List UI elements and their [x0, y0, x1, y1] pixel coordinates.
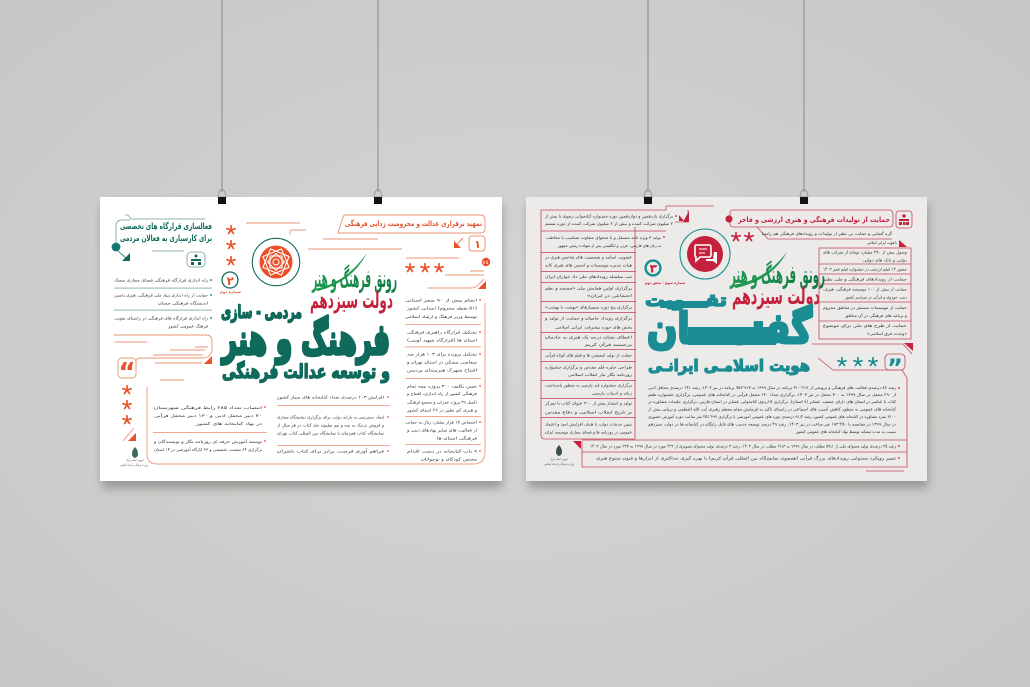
list: left panel rows: عمومی در روزنامه ها و فضای مجازی موسسه ایران — [545, 430, 632, 434]
paragraph: growth statistics: کتاب با عناصر در استان های دارای جمعیت عشایر (۹ استان)، برگزاری ۵ اردوی کتابخوانی عشایر در استان فارس، برگزاری جلسات مشاوره در — [647, 399, 896, 404]
table: right column: و برنامه های فرهنگی در آن مناطق — [845, 313, 907, 318]
badge: number 2: شماره دوم — [220, 290, 241, 294]
title: main heading: فرهنگ و هنر — [221, 315, 390, 365]
table: right column: حضور ۱۲ فیلم ارزشی در جشنواره فیلم فجر ۱۴۰۳ — [823, 266, 907, 272]
list: left top bullets: حمایت از راه اندازی بنیاد ملی فرهنگی، هنری یاسین — [114, 292, 208, 298]
connector lines right — [406, 258, 486, 289]
poster 1 — [100, 197, 502, 481]
list: left top bullets — [114, 278, 212, 328]
table: right column: دینی، حوزوی و قرآنی در سراسر کشور — [844, 294, 907, 300]
list: right column bullets: انجام بیش از ۹۰ سفر استانی — [405, 298, 477, 302]
list: bottom left bullets: توسعه آموزش حرفه ای روزنامه نگار و نویسندگان و — [153, 439, 263, 444]
table: right column: وصول بیش از ۲۷۰ میلیارد تومان از شرکت های — [823, 250, 907, 254]
icon: box with number one: ۱ — [474, 238, 481, 251]
table: right column: حمایت از موسسات مستقر در مناطق محروم — [823, 305, 907, 310]
badge: section 11: ۱۱ — [482, 260, 488, 266]
logo: ministry emblem right — [544, 445, 574, 466]
logo: ministry emblem left: وزارت فرهنگ و ارشاد اسلامی — [120, 463, 148, 467]
list: middle column bullets: افزایش ۱۰۳ درصدی تعداد کتابخانه های سیار کشور — [276, 394, 384, 400]
list: right column bullets: فرهنگی کشور از راه اندازی، افتتاح و — [406, 391, 477, 396]
quote box: “ — [118, 358, 136, 388]
emblem: chat bubbles — [680, 229, 730, 279]
list: left panel rows: تولید و انتشار بیش از ۳۰۰ عنوان کتاب با تمرکز — [544, 400, 633, 406]
list: left panel rows: برگزاری جشنواره قند پارسی به منظور پاسداشت — [545, 382, 632, 388]
list: right column bullets: تعیین تکلیف ۳۰۰ پروژه نیمه تمام — [407, 384, 478, 388]
badge: number 2: ۲ — [227, 274, 235, 288]
list: left panel rows: اجتماعی در ایران» — [587, 293, 632, 298]
heading: left block — [120, 221, 212, 244]
logo: ministry emblem left: جمهوری اسلامی ایران — [126, 458, 144, 462]
table: right column: دولتی و بانک های دولتی — [863, 258, 907, 262]
list: middle column bullets — [276, 394, 390, 454]
list: middle column bullets: فراهم آوری فرصت برابر برای کتاب ناشران — [277, 448, 384, 454]
emblem: orange circle with geometric star — [252, 238, 300, 286]
title: main heading — [221, 302, 390, 383]
table: right column: گره گشایی و حمایت بی نظیر از تولیدات و رویدادهای فرهنگی هم راستا — [762, 231, 892, 236]
list: right column bullets: از فعالیت های سایر نهادهای دینی و — [406, 428, 477, 432]
calligraphy: slogan right — [729, 252, 825, 310]
connector: right section — [582, 343, 913, 467]
list: left panel rows: پخش های حوزه پیشرفت ایرانی اسلامی — [555, 324, 633, 330]
table: right column: «وحدت فرق اسلامی» — [867, 331, 907, 336]
frame: left panel — [541, 206, 714, 439]
list: left panel rows: برجسته قرآن کریم — [585, 342, 632, 347]
logo: ministry emblem left — [120, 447, 148, 467]
title: main heading right: تقـــویت — [645, 291, 727, 311]
badge: number 3: شماره سوم - بخش دوم — [645, 281, 685, 285]
list: left top bullets: فرهنگ عمومی کشور — [167, 324, 208, 328]
badge: number 3: ۳ — [650, 262, 658, 276]
list: middle column bullets: و فروش نزدیک به سه و نیم میلیون جلد کتاب در هر سال از — [276, 422, 384, 428]
rows: bottom statistics: تغییر رویکرد محتوایی رویدادهای بزرگ قرآنی (همچون نمایشگاه بین المللی قرآن کریم) با بهره گیری حداکثری از ابزارها و فنون متنوع هنری — [596, 454, 897, 460]
calligraphy: slogan — [310, 253, 397, 314]
paragraph: growth statistics: در سال ۱۳۹۹ در مقایسه با ۱۸۳٬۲۵۰ نفر ساعت در تیر ۱۴۰۳، رشد ۴۹ درصد توسعه خدمت های فایل رایگان در کتابخانه ها در دولت سیزدهم — [648, 422, 896, 426]
list: bottom left bullets: در نهاد کتابخانه های کشور — [195, 421, 262, 426]
list: right column bullets: ۹ باب کتابخانه در دست اقدام — [407, 448, 478, 454]
clip 3 — [644, 190, 652, 204]
list: right column bullets: اختصاص ۱۷ هزار میلیارد ریال به حمایت — [405, 420, 477, 424]
calligraphy: slogan: دولت سیزدهم — [310, 288, 393, 314]
frame: left heading — [112, 215, 205, 261]
paragraph: growth statistics: رشد ۸۶ درصدی فعالیت های فرهنگی و ترویجی از ۳۱۰٬۶۱۳ برنامه در سال ۱۳۹۹ به ۷۵۶٬۹۱۷ برنامه در تیر ۱۴۰۳، رشد ۱۴۱ درصدی محافل ادبی — [648, 385, 896, 390]
list: left top bullets: راه اندازی قرارگاه های فرهنگی در راستای تقویت — [114, 316, 208, 320]
outer frame bottom — [147, 303, 485, 464]
icon: network box — [187, 252, 205, 267]
list: bottom left bullets: برگزاری ۶۴ نشست تخصصی و ۲۳ کارگاه آموزشی در ۱۴ استان — [154, 447, 262, 452]
table: right column: حمایت از رویدادهای فرهنگی و ملی نظیر — [822, 276, 907, 282]
list: right column bullets — [405, 298, 481, 462]
poster 1: رونق فرهنگ و هنر — [311, 264, 397, 294]
calligraphy: slogan right: دولت سیزدهم — [732, 284, 820, 310]
list: left panel rows: تولید ۳ ویژه نامه مستقل و با محتوای متفاوت متناسب با مخاطب — [546, 235, 662, 240]
poster 1 paper — [100, 197, 502, 481]
title: main heading right — [645, 291, 812, 375]
heading: left block: برای کارسیاری به فعالان مردمی — [120, 233, 212, 244]
list: middle column bullets: ایجاد دسترسی به یارانه دولت برای برگزاری نمایشگاه مجازی — [277, 414, 384, 420]
list: right column bullets: استان ها (قرارگاه شهید آوینی) — [407, 338, 477, 342]
title: main heading: مردمی - سازی — [221, 302, 302, 323]
list: left panel rows: برگزاری رویداد حامیان و حمایت از تولید و — [544, 316, 632, 320]
paragraph: growth statistics — [647, 385, 900, 434]
poster 2 — [526, 197, 927, 481]
list: left panel rows: تبیین خدمات دولت با هدف افزایش امید و اعتماد — [545, 422, 633, 426]
stars: centre — [227, 226, 235, 264]
list: middle column bullets: نمایشگاه کتاب همزمان با نمایشگاه بین المللی کتاب تهران — [277, 430, 384, 436]
rows: bottom statistics: رشد ۲۵ درصدی تولید محتوای ملی از ۵۳٫۱ مطلب در سال ۱۳۹۹ به ۶۶٫۳ مطلب در سال ۱۴۰۳، رشد ۳ درصدی تولید محتوای تصویری از ۲۲۲ مورد در سال ۱۳۹۹ به ۲۳۷ مورد در سال ۱۴۰۳ — [590, 444, 896, 448]
list: left panel rows: عضویت اساتید و شخصیت های شاخص هنری در — [544, 254, 633, 260]
frame: right heading: حمایت از تولیدات فرهنگی و هنری ارزشی و فاخر — [737, 215, 890, 224]
title: main heading right: گفتمـــان — [647, 304, 812, 353]
list: left panel rows: برگزاری بازدهمین و دوازدهمین دوره جشنواره کتابخوانی رضوی با بیش از — [544, 214, 673, 218]
list: right column bullets: فرهنگی استان ها — [437, 436, 477, 440]
list: left panel rows: ۲ میلیون شرکت کننده و بیش از ۲ میلیون شرکت کننده از دوره ششم — [545, 221, 674, 226]
list: left panel rows: هیات مدیره موسسات و انجمن های هنری کانه — [545, 262, 632, 268]
stars: right row — [406, 264, 443, 272]
list: left top bullets: اندیشگاه فرهنگی حسان — [158, 300, 208, 306]
icon: network box right — [896, 211, 912, 228]
clip 1 — [218, 190, 226, 204]
list: right column bullets: توسط وزیر فرهنگ و ارشاد اسلامی — [405, 314, 478, 319]
stars: top red — [732, 233, 753, 240]
logo: ministry emblem right: وزارت فرهنگ و ارشاد اسلامی — [544, 462, 574, 466]
frame: right heading — [338, 215, 485, 233]
paragraph: growth statistics: کتابخانه های عمومی به منظور کاهش آسیب های اجتماعی در راستای تاکید به فرمایش مقام معظم رهبری آیت الله العظمی و برپایی بیش از — [647, 406, 896, 412]
list: left panel rows: برگزاری پنج دوره سمینارهای «بهشت با بهشت» — [545, 304, 632, 310]
clip 2 — [374, 190, 382, 204]
table: right column — [757, 227, 911, 339]
list: bottom left bullets — [153, 405, 267, 452]
list: bottom left bullets: انتصاب تعداد ۲۸۵ رابط فرهنگی شهرستان — [154, 405, 262, 410]
list: left panel rows: بر تاریخ انقلاب اسلامی و دفاع مقدس — [545, 410, 632, 414]
stars: teal row — [838, 358, 877, 366]
table: right column: با هویت ایرانی اسلامی — [867, 240, 897, 245]
frame: right heading — [725, 210, 893, 227]
list: right column bullets: و هنری کم نظیر در ۲۶ استان کشور — [406, 408, 477, 412]
clip 4 — [800, 190, 808, 204]
list: left top bullets: راه اندازی قرارگاه فرهنگی فضای مجازی مسک — [114, 278, 208, 282]
poster 2 paper — [526, 197, 927, 481]
list: left panel rows: حمایت از تولید انیمیشن ها و فیلم های کوتاه قرآنی — [545, 352, 632, 358]
title: main heading: و توسعه عدالت فرهنگی — [222, 360, 390, 383]
title: main heading right: هویت اسلامـی ایرانـی — [648, 356, 810, 375]
connector: quote to logo — [123, 428, 136, 441]
list: left panel rows: اعطای نشان درجه یک هنری به خادمان — [545, 334, 632, 340]
list: left panel rows — [541, 214, 677, 434]
list: left panel rows: ثبت سلسله رویدادهای ملی داد خواران ایران — [545, 274, 633, 279]
list: left panel rows: طراحی جایزه قلم مقدس و برگزاری جشنواره — [545, 364, 633, 370]
list: right column bullets: (۵۱ نقطه محروم) استانی کشور — [406, 306, 477, 310]
table: right column: حمایت از طرح های ملی برای موضوع — [823, 323, 908, 328]
list: right column bullets: تکمیل ۳۹ پروژه عمرانی و مجتمع فرهنگی — [407, 400, 478, 404]
connector lines around emblem — [246, 223, 402, 249]
stars: quote column — [123, 386, 131, 424]
quote box right: ” — [887, 354, 903, 382]
badge: section 11 — [482, 258, 490, 266]
list: left panel rows: روزنامه نگار نیاز انقلاب اسلامی — [568, 372, 632, 377]
list: left panel rows: به زبان های فارسی، عربی و انگلیسی پس از شهادت رئیس جمهور — [557, 243, 661, 248]
heading: left block: فعالسازی قرارگاه های تخصصی — [120, 221, 212, 232]
poster 2: رونق فرهنگ و هنر — [729, 260, 825, 290]
frame: right heading: تمهید برقراری عدالت و محرومیت زدایی فرهنگی — [345, 219, 482, 228]
badge: number 2 — [220, 272, 241, 294]
paragraph: growth statistics: ۳۱۰۰ نمره مشاوره در کتابخانه های عمومی کشور، رشد ۹۱٫۴ درصدی دوره های عمومی آموزشی با برگزاری ۲۵۱٬۶۹۶ نفر ساعت دوره آموزش حضوری — [648, 414, 896, 419]
table: right column: حمایت از بیش از ۱۰۰ موسسه فرهنگی، هنری، — [823, 286, 907, 292]
list: left panel rows: برگزاری اولین همایش ملی «مسجد و نظم — [545, 286, 632, 290]
list: left panel rows: زبان و ادبیات پارسی — [592, 390, 632, 396]
rows: bottom statistics — [573, 440, 907, 471]
list: right column bullets: افتتاح شهرک هنرمندان پردیس — [407, 368, 477, 372]
badge: number 3 — [645, 261, 685, 285]
list: right column bullets: تشکیل قرارگاه راهبری فرهنگی — [407, 330, 478, 334]
poster shadows — [102, 204, 928, 488]
paragraph: growth statistics: از ۲۹۰ محفل در سال ۱۳۹۹ به ۷۰۰ محفل در تیر ۱۴۰۳، برگزاری تعداد ۱۳۰ محفل قرآنی در کتابخانه های عمومی، برگزاری جشنواره طعم — [648, 392, 896, 397]
list: right column bullets: مختص کودکان و نوجوانان — [421, 456, 477, 462]
paragraph: growth statistics: نسبت به مدت مشابه توسط نهاد کتابخانه های عمومی کشور — [795, 429, 896, 434]
list: right column bullets: متقاضی مسکن در استان تهران و — [406, 360, 477, 364]
orange connector lines left — [114, 335, 212, 380]
hanging strings — [222, 0, 804, 192]
binder clips — [218, 190, 808, 204]
icon: box with number one — [454, 236, 485, 251]
logo: ministry emblem right: جمهوری اسلامی ایران — [550, 457, 568, 461]
list: right column bullets: تشکیل پرونده برای ۱۰۳ هزار صد — [407, 352, 478, 356]
list: bottom left bullets: ۷۰ دبیر محفل ادبی و ۱۳۰ دبیر محفل قرآنی — [154, 413, 262, 418]
